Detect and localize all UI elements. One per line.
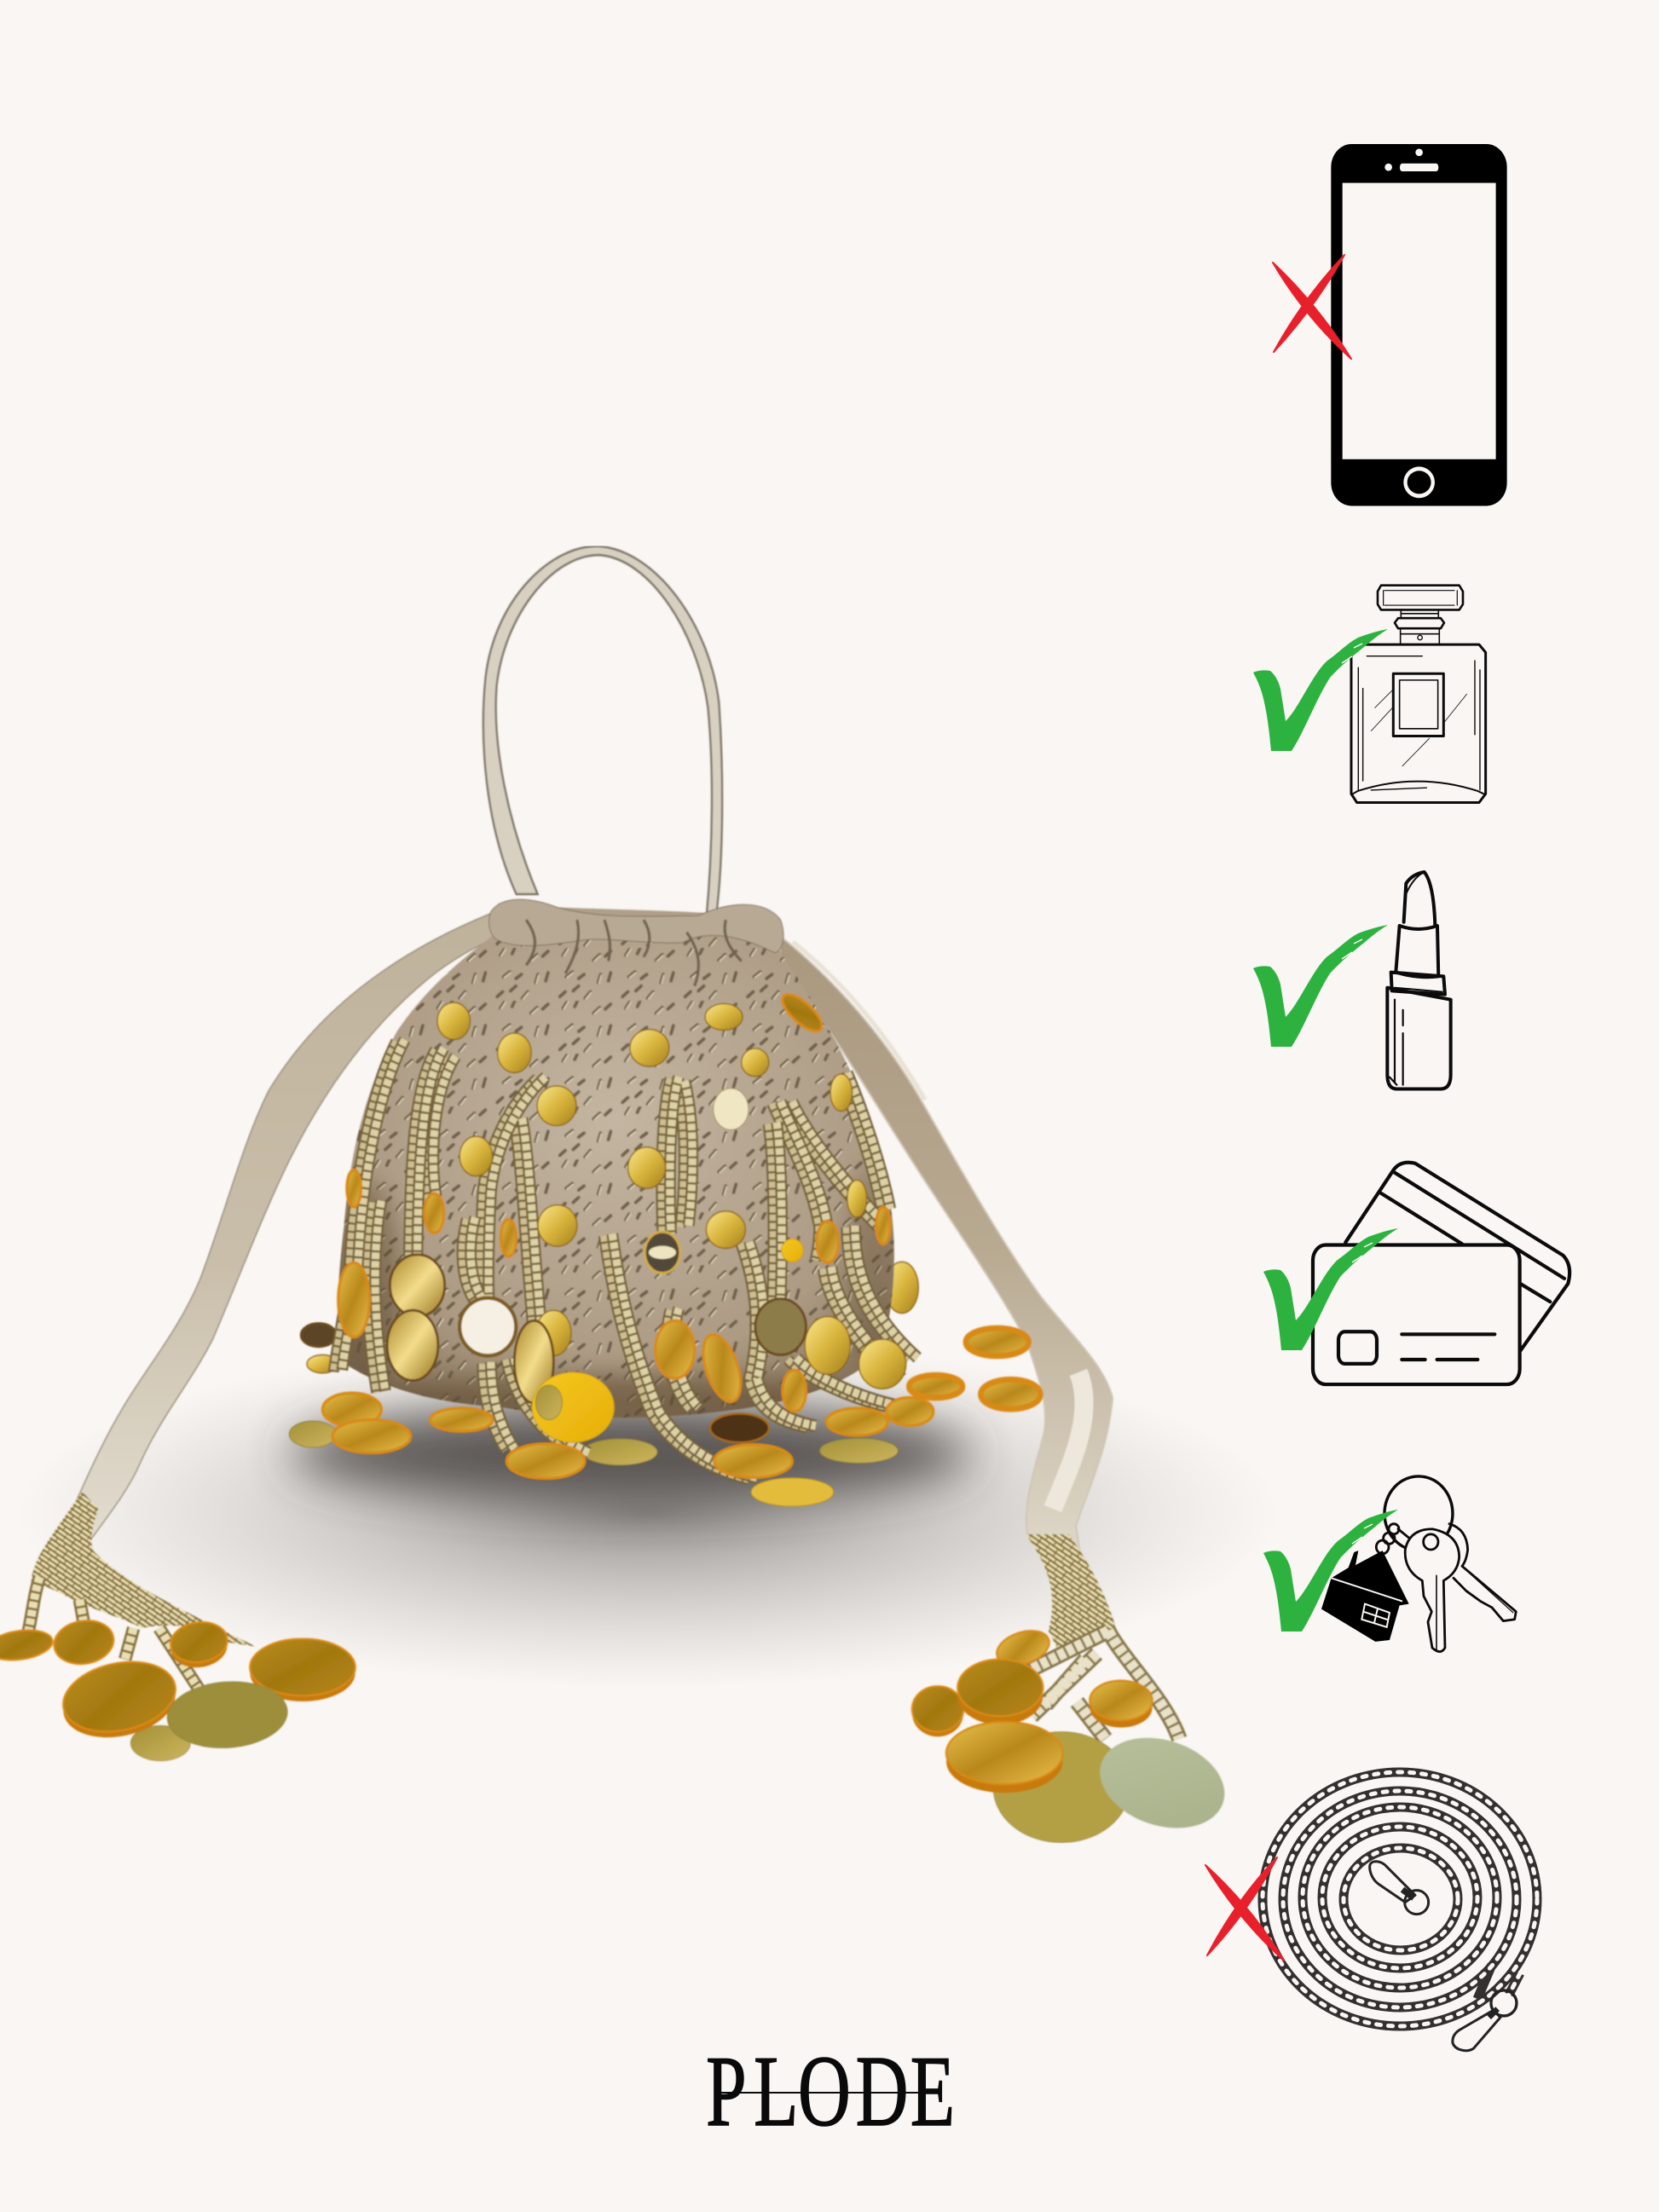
logo: PLODE: PLODE	[706, 2036, 955, 2147]
bag handle	[483, 546, 722, 919]
chain clasps	[1370, 1862, 1517, 2051]
right tassel beads	[1023, 1534, 1179, 1739]
icon: green tick on keys	[1263, 1510, 1398, 1632]
icon: perfume bottle	[1351, 586, 1486, 803]
sequins on the body	[347, 989, 890, 1262]
hanging discs	[322, 1232, 934, 1478]
handbag product image	[0, 546, 1236, 1843]
icon: bank cards	[1313, 1163, 1569, 1384]
icon: phone	[1331, 144, 1507, 505]
right tassel coins	[912, 1625, 1236, 1843]
ground shadow	[17, 1338, 1279, 1688]
gathered drawstring top	[488, 899, 783, 953]
left tassel beads	[28, 1492, 256, 1694]
icon: green tick on perfume	[1253, 629, 1388, 751]
icon: chain strap	[1263, 1772, 1537, 2051]
icon: green tick on lipstick	[1253, 925, 1388, 1047]
icon: lipstick	[1387, 872, 1451, 1089]
right drawstring strap	[780, 936, 1113, 1560]
icon: green tick on cards	[1263, 1228, 1398, 1350]
left drawstring strap	[61, 914, 503, 1547]
bag body and beading	[322, 899, 934, 1479]
chain coils	[1263, 1772, 1537, 2026]
icon: red cross on chain	[1205, 1857, 1284, 1961]
right side floor coins	[909, 1328, 1041, 1409]
coins behind bag	[289, 1262, 918, 1506]
left tassel coins	[0, 1616, 356, 1761]
bead fringe strands	[333, 1040, 917, 1479]
left tassel with coins	[0, 1492, 356, 1761]
icon: red cross on phone	[1273, 255, 1351, 359]
right tassel with coins	[912, 1534, 1236, 1843]
icon: keys with house keyring	[1321, 1476, 1516, 1652]
fabric shading	[331, 1168, 898, 1432]
